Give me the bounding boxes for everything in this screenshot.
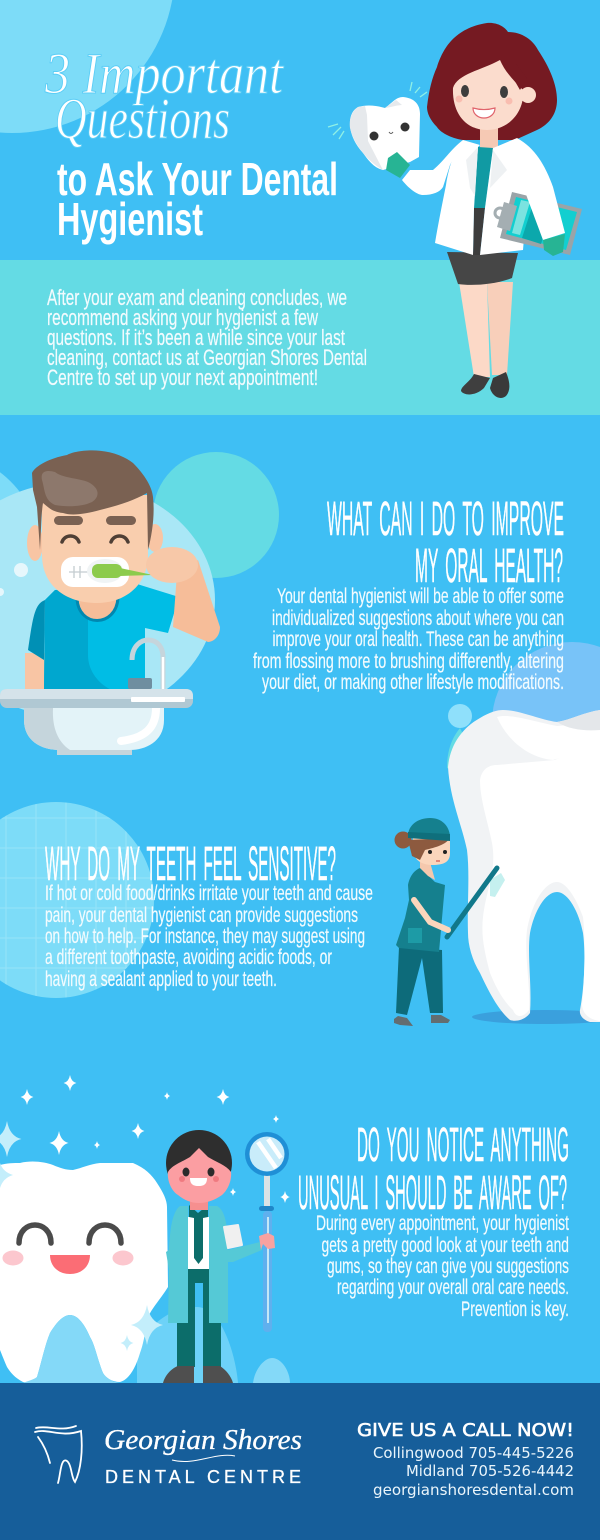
illustration: boy brushing teeth xyxy=(0,450,220,755)
coat xyxy=(166,1205,262,1323)
illustration: giant tooth xyxy=(447,704,600,1024)
toothbrush and arm xyxy=(92,547,220,642)
mirror xyxy=(245,1132,289,1332)
head and cap xyxy=(394,818,450,880)
pale sparkles xyxy=(0,1163,163,1351)
illustration: hygienist holding tooth xyxy=(328,23,582,398)
lab coat body xyxy=(402,138,530,255)
body text: on how to help. For instance, they may suggest using xyxy=(45,925,365,948)
body text xyxy=(316,1212,569,1321)
grid circle xyxy=(0,800,160,1000)
contact details: Collingwood 705-445-5226 xyxy=(373,1444,574,1462)
title: script line: 3 Important xyxy=(44,41,285,106)
body text: having a sealant applied to your teeth. xyxy=(45,968,277,991)
title: bold line: Hygienist xyxy=(57,193,203,245)
clipboard xyxy=(495,192,582,255)
shoes xyxy=(163,1366,194,1383)
logo xyxy=(35,1425,302,1487)
illustration: dentist with mirror xyxy=(163,1130,289,1383)
background blobs xyxy=(0,452,600,802)
sparkles xyxy=(21,1075,290,1203)
arm xyxy=(414,900,448,930)
title: script line: Questions xyxy=(55,86,230,151)
body text xyxy=(45,882,373,991)
sink xyxy=(0,640,193,755)
title: bold line xyxy=(57,153,338,245)
held tooth xyxy=(328,82,427,178)
panel: question 3 xyxy=(0,1075,569,1383)
contact details: Midland 705-526-4442 xyxy=(406,1462,574,1480)
intro text: recommend asking your hygienist a few xyxy=(47,305,318,330)
lab coat sleeve xyxy=(517,138,565,240)
wordmark subtitle: DENTAL CENTRE xyxy=(105,1467,301,1487)
head xyxy=(166,1130,232,1210)
body text: a different toothpaste, avoiding acidic foods, or xyxy=(45,946,332,969)
neck and face xyxy=(453,60,536,151)
icon: tooth outline xyxy=(35,1426,82,1483)
wordmark swoosh xyxy=(172,1455,235,1462)
intro text: cleaning, contact us at Georgian Shores Dental xyxy=(47,345,367,370)
contact details: GIVE US A CALL NOW! xyxy=(357,1420,574,1441)
heading xyxy=(298,1119,569,1220)
panel: footer xyxy=(0,1383,600,1540)
contact details xyxy=(357,1420,574,1499)
body text: If hot or cold food/drinks irritate your teeth and cause xyxy=(45,882,373,905)
hand xyxy=(259,1233,275,1250)
panel: question 2 xyxy=(0,704,600,1026)
scrubs xyxy=(396,868,445,952)
background hills xyxy=(137,1307,290,1383)
toothbrush xyxy=(447,868,505,937)
hair xyxy=(427,23,557,140)
intro text: Centre to set up your next appointment! xyxy=(47,365,318,390)
illustration: smiling tooth xyxy=(0,1162,168,1383)
title: bold line: to Ask Your Dental xyxy=(57,153,338,205)
intro text xyxy=(47,285,367,390)
head xyxy=(27,450,163,603)
pale sparkle top xyxy=(0,1121,21,1157)
skirt xyxy=(447,252,518,285)
heading xyxy=(327,493,564,593)
glove: clipboard hand xyxy=(543,234,565,256)
wordmark: Georgian Shores xyxy=(104,1425,302,1456)
body text xyxy=(253,585,564,694)
panel: header xyxy=(0,0,600,415)
illustration: small hygienist with toothbrush xyxy=(394,818,505,1026)
left arm xyxy=(25,653,45,690)
title: script line xyxy=(44,41,285,151)
glove: tooth hand xyxy=(386,152,410,178)
pants and shoes xyxy=(396,947,443,1015)
contact details: georgianshoresdental.com xyxy=(373,1481,574,1499)
panel: question 1 xyxy=(0,450,600,802)
shirt xyxy=(28,584,179,690)
body text: pain, your dental hygienist can provide suggestions xyxy=(45,904,358,927)
intro text: After your exam and cleaning concludes, we xyxy=(47,285,347,310)
trousers xyxy=(177,1269,221,1367)
legs and shoes xyxy=(459,282,513,398)
intro text: questions. If it’s been a while since your last xyxy=(47,325,345,350)
